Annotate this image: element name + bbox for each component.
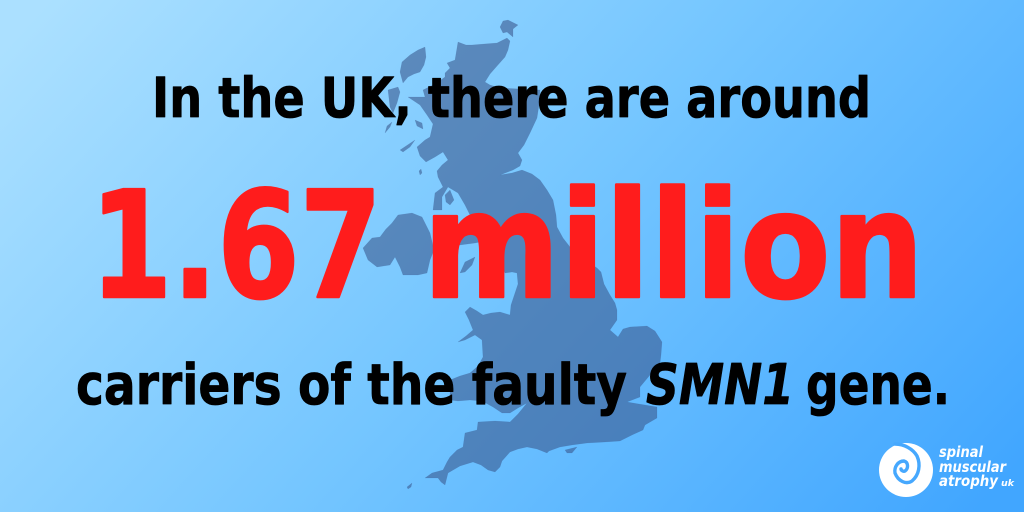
big number: 1.67 bbox=[90, 160, 382, 332]
Orkney and Shetland bbox=[500, 20, 518, 37]
logo icon bbox=[879, 443, 933, 497]
logo text: atrophy bbox=[939, 472, 999, 490]
logo text: spinal bbox=[939, 443, 984, 461]
Northern Ireland bbox=[363, 213, 434, 275]
logo text bbox=[939, 443, 1015, 490]
logo text: uk bbox=[1001, 479, 1015, 489]
closing line: gene. bbox=[806, 353, 950, 418]
logo bbox=[879, 443, 1015, 497]
closing line: carriers of the faulty bbox=[76, 353, 627, 418]
Lewis bbox=[400, 47, 426, 83]
heading line: In the UK, there are around bbox=[152, 66, 871, 130]
big number: million bbox=[423, 160, 924, 332]
logo text: muscular bbox=[939, 458, 1007, 476]
big number bbox=[90, 160, 924, 332]
small isles bbox=[385, 120, 577, 489]
closing line: SMN1 bbox=[646, 353, 794, 418]
Skye bbox=[388, 87, 400, 113]
map of the UK bbox=[363, 20, 662, 489]
